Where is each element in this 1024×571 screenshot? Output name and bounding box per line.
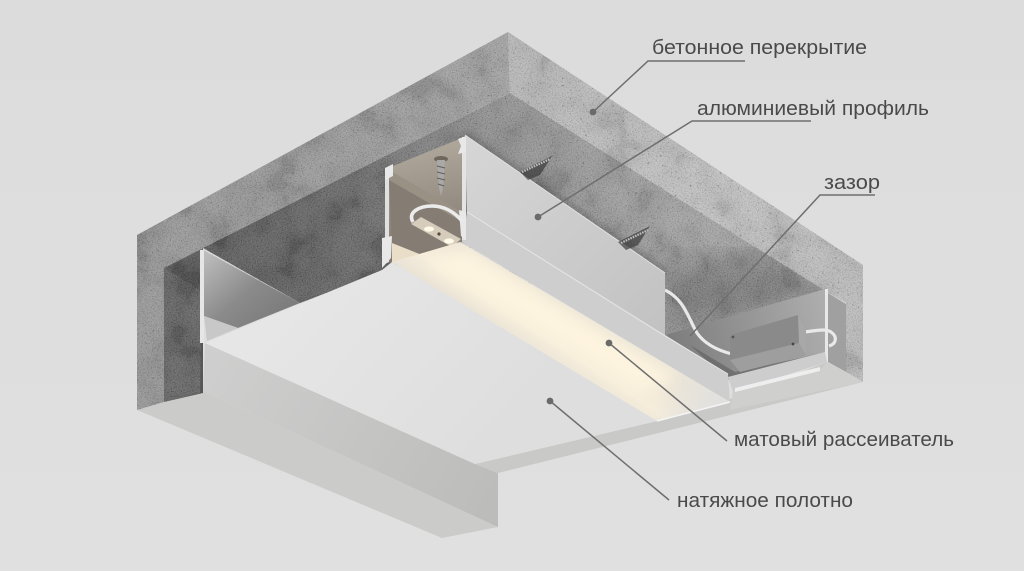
ledge xyxy=(728,352,827,392)
concrete slab xyxy=(130,25,870,415)
side wall xyxy=(828,293,846,372)
recess top shade xyxy=(164,250,200,290)
profile lower band xyxy=(462,212,730,402)
profile crease xyxy=(467,212,728,374)
aluminium profile xyxy=(382,135,730,402)
diffuser body xyxy=(392,242,730,421)
white vertical edge xyxy=(825,289,828,362)
diffuser glow xyxy=(450,255,728,414)
ceiling drop frame xyxy=(137,343,863,538)
upper screw xyxy=(520,156,552,180)
profile left rail xyxy=(385,168,389,264)
lower screw xyxy=(618,226,650,250)
inner wall xyxy=(665,289,825,377)
profile top edge xyxy=(465,135,665,273)
label: matte diffuser xyxy=(606,340,954,451)
light strip xyxy=(204,316,238,341)
niche groove xyxy=(389,170,462,222)
profile right rail xyxy=(462,137,466,240)
clips xyxy=(382,136,466,268)
right wall with driver box xyxy=(665,289,863,410)
matte diffuser xyxy=(392,242,730,421)
power cable left xyxy=(665,290,732,354)
box body xyxy=(730,315,806,372)
concrete left face xyxy=(137,32,510,410)
shadow under box xyxy=(690,345,825,380)
LED wire xyxy=(411,206,462,222)
profile side panel xyxy=(465,135,665,336)
concrete left recess xyxy=(164,248,203,402)
frame inner face xyxy=(203,343,498,527)
ledge white strip xyxy=(735,367,820,392)
label: aluminium profile: алюминиевый профиль xyxy=(697,98,929,120)
concrete texture xyxy=(130,25,870,415)
stretch ceiling panel xyxy=(200,250,657,464)
LED strip xyxy=(411,217,461,247)
label: gap: зазор xyxy=(824,172,880,194)
label: concrete slab: бетонное перекрытие xyxy=(652,37,867,59)
ledge lower band xyxy=(730,362,863,410)
niche background xyxy=(388,138,462,263)
concrete underside xyxy=(203,93,827,335)
label: stretch ceiling xyxy=(547,398,853,512)
niche lower shade xyxy=(389,180,462,256)
dark panel behind xyxy=(203,250,300,328)
canvas surface xyxy=(205,262,657,464)
niche glow xyxy=(392,243,422,264)
box bottom xyxy=(730,343,806,372)
label: matte diffuser: матовый рассеиватель xyxy=(734,429,954,451)
label: concrete slab xyxy=(590,37,867,115)
white edge xyxy=(200,250,204,343)
label: aluminium profile xyxy=(535,98,929,220)
ceiling screws xyxy=(520,156,650,250)
label: stretch ceiling: натяжное полотно xyxy=(677,490,853,512)
concrete right face xyxy=(508,32,863,382)
vertical screw xyxy=(434,156,448,196)
frame lower face xyxy=(137,391,498,538)
box screws xyxy=(732,336,734,338)
box side xyxy=(798,315,806,355)
diffuser highlight edge xyxy=(657,402,730,421)
power cable right xyxy=(804,330,835,346)
driver box xyxy=(730,315,806,372)
frame right band xyxy=(475,362,863,473)
label: gap xyxy=(690,172,880,336)
underside shade xyxy=(465,135,830,340)
